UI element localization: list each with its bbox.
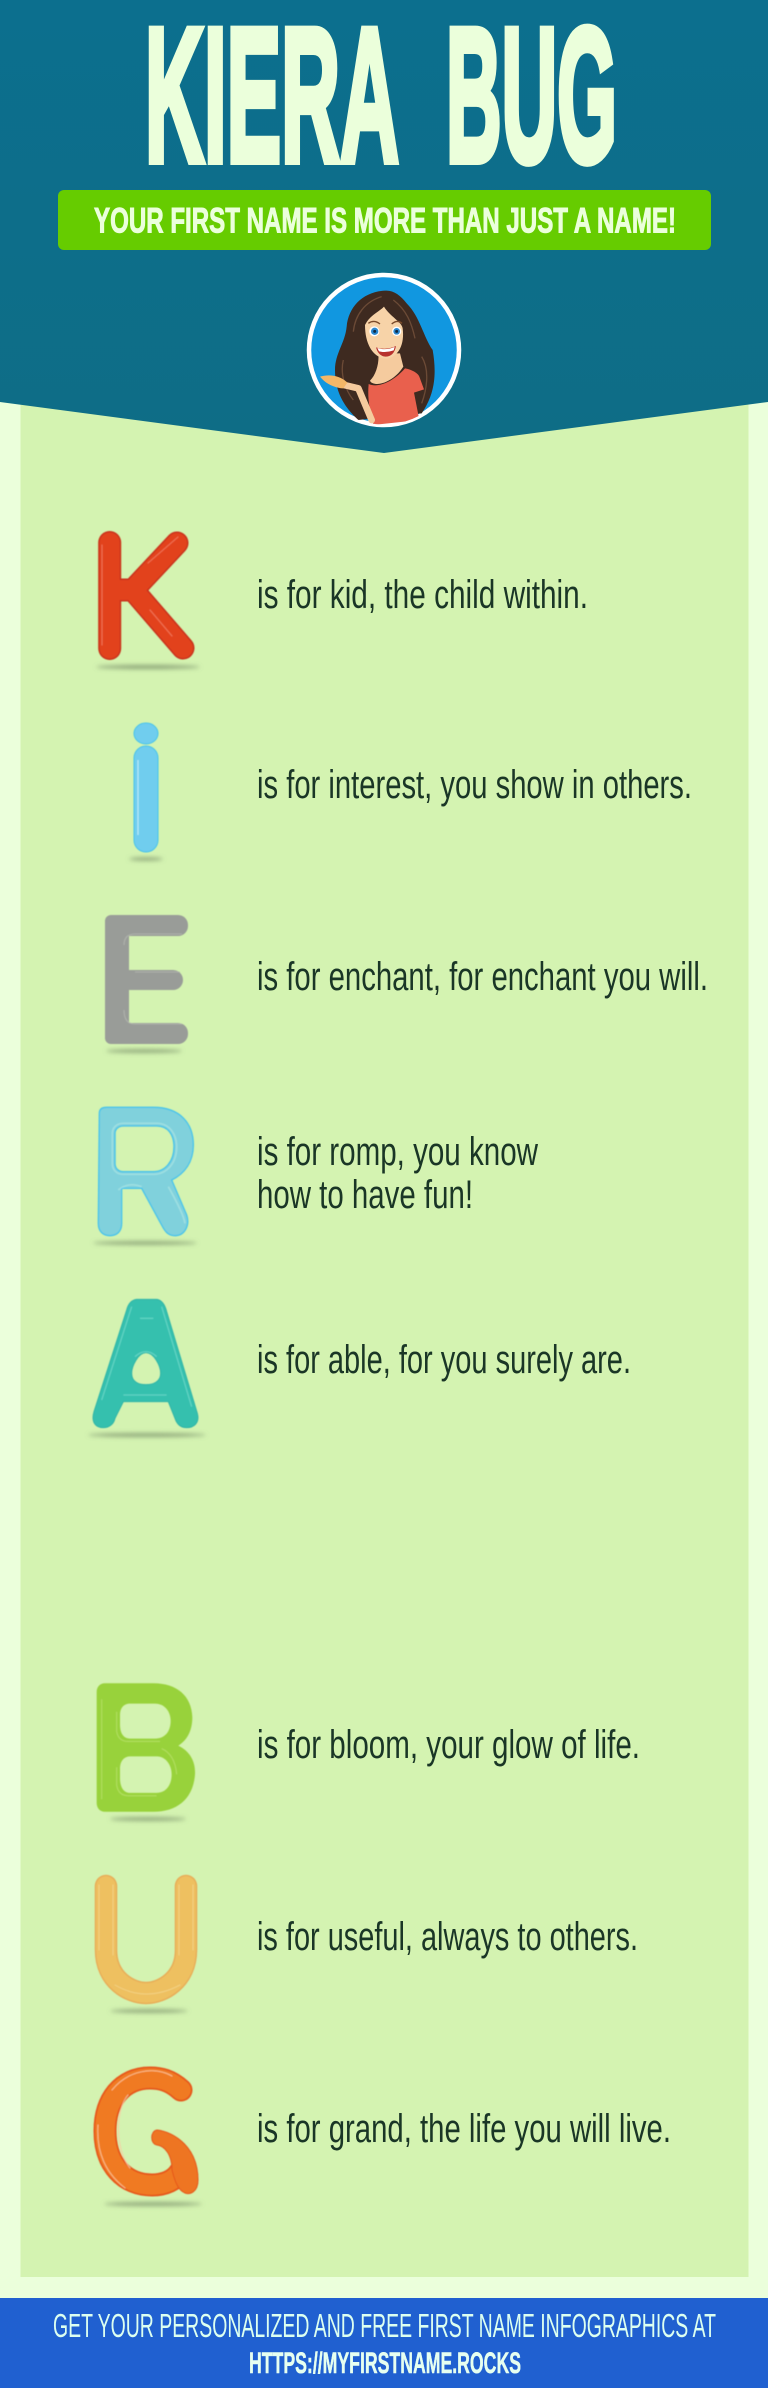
text: R line <box>257 1130 538 1217</box>
icon: letter E <box>105 915 188 1053</box>
neck and chest <box>370 353 403 384</box>
hair strands <box>342 297 427 403</box>
arm and hand <box>340 384 372 420</box>
face <box>365 307 403 359</box>
text: B line: is for bloom, your glow of life. <box>257 1723 640 1767</box>
footer url: HTTPS://MYFIRSTNAME.ROCKS <box>249 2347 521 2380</box>
letter row A <box>88 1299 631 1437</box>
letter row K <box>96 537 588 669</box>
hair <box>335 291 435 420</box>
subtitle banner <box>58 190 711 250</box>
text: K line: is for kid, the child within. <box>257 573 588 617</box>
icon: letter K <box>96 537 200 669</box>
header banner with chevron <box>0 0 768 453</box>
text: A line: is for able, for you surely are. <box>257 1338 631 1382</box>
icon: letter B <box>97 1683 195 1821</box>
text: R line: is for romp, you know <box>257 1130 538 1174</box>
icon: letter R <box>93 1107 197 1245</box>
text: R line: how to have fun! <box>257 1173 473 1217</box>
content panel <box>20 380 748 2277</box>
letter row I <box>129 723 692 861</box>
icon: letter U <box>99 1885 193 2013</box>
letter row B <box>97 1683 640 1821</box>
eyes <box>369 326 379 336</box>
icon: letter A <box>88 1299 206 1437</box>
icon: letter G <box>98 2071 202 2206</box>
icon: letter i <box>129 723 163 861</box>
shirt <box>368 368 424 425</box>
letter row U <box>99 1885 638 2013</box>
brows <box>368 321 402 324</box>
letter row E <box>105 915 708 1053</box>
mouth <box>376 346 396 357</box>
letter row R <box>93 1107 538 1245</box>
avatar: woman in circle <box>309 275 459 425</box>
footer <box>0 2298 768 2388</box>
letter row G <box>98 2071 671 2206</box>
